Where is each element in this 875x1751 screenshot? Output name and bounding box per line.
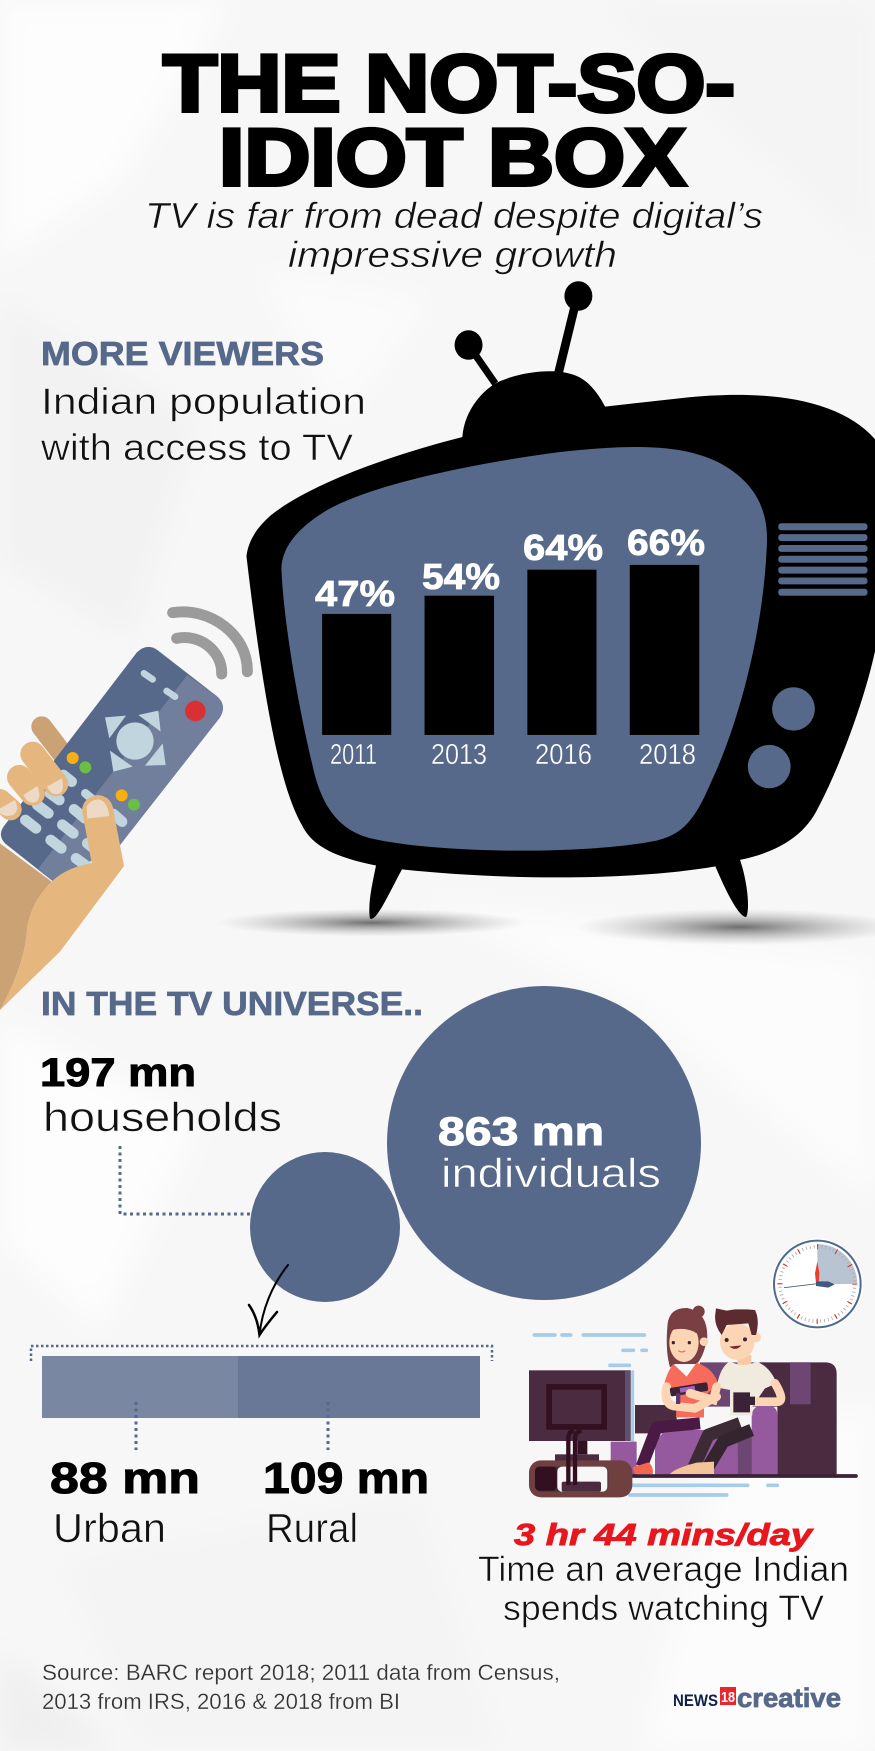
hand [0,754,124,1010]
callout: viewing time: spends watching TV [503,1589,825,1628]
label: 197 mn households: households [43,1094,282,1140]
label: 88 mn urban [50,1454,200,1551]
logo: news18 creative: NEWS [673,1691,718,1710]
speaker grille [778,523,868,596]
label: 109 mn rural: 109 mn [263,1454,429,1503]
label: 863 mn individuals: 863 mn [438,1110,604,1154]
chart year labels: 2013 [431,739,487,771]
tv body [246,281,875,919]
motion lines [534,1335,777,1495]
callout: viewing time: 3 hr 44 mins/day [514,1517,814,1552]
remote [1,647,223,882]
label: 197 mn households [40,1051,282,1140]
chart year labels: 2018 [639,739,696,771]
label: 88 mn urban: 88 mn [50,1454,200,1503]
logo: news18 creative: creative [737,1683,841,1713]
chart value labels: 47% [315,573,395,614]
dpad [105,711,166,772]
label: 197 mn households: 197 mn [40,1051,196,1095]
label: 109 mn rural: Rural [266,1505,358,1551]
woman [633,1306,718,1474]
tv screen [281,447,868,851]
text: Indian population with access to TV: with access to TV [40,427,353,468]
heading: in the tv universe: IN THE TV UNIVERSE.. [41,985,423,1022]
tv set with bar chart [246,281,875,919]
subtitle: impressive growth [288,234,617,275]
chart value labels: 54% [422,556,500,597]
tv knobs [748,687,815,788]
subtitle [145,195,763,275]
remote lights [185,701,206,721]
chart value labels [315,522,705,614]
remote keys [25,673,175,867]
arrow: down to household split [249,1265,288,1335]
logo: news18 creative: 18 [721,1689,735,1706]
heading: more viewers: MORE VIEWERS [41,335,324,372]
callout: viewing time: Time an average Indian [478,1550,849,1589]
title: THE NOT-SO- [163,39,735,129]
illustration: couple watching tv on sofa [529,1306,856,1497]
icon: clock [772,1238,863,1330]
chart year labels: 2011 [330,739,377,771]
label: 109 mn rural [263,1454,429,1551]
back finger [42,727,63,755]
tv set on stand [529,1370,632,1497]
chart year labels: 2016 [535,739,592,771]
bubble: 863 mn individuals [387,986,701,1300]
label: 863 mn individuals: individuals [441,1150,661,1196]
chart bars [322,565,699,735]
dotted bracket [31,1346,492,1361]
tv floor shadows [216,909,875,945]
source note: 2013 from IRS, 2016 & 2018 from BI [42,1689,400,1714]
dotted leader lines [136,1402,328,1450]
title: IDIOT BOX [219,113,686,203]
dotted connector to households bubble [120,1146,250,1214]
signal arcs [173,612,247,674]
title [163,39,735,203]
bubble: 197 mn households [250,1152,400,1302]
chart year labels [330,739,696,771]
icon: hand holding remote [0,612,247,1010]
chart value labels: 64% [523,527,603,568]
text: Indian population with access to TV: Indian population [41,381,366,422]
chart value labels: 66% [627,522,705,563]
source note: Source: BARC report 2018; 2011 data from Census, [42,1660,560,1685]
label: 863 mn individuals [438,1110,661,1196]
stacked bar: urban and rural [42,1356,480,1418]
source note [42,1660,560,1714]
man [670,1308,781,1474]
logo: news18 creative [673,1683,841,1713]
sofa [611,1362,856,1476]
text: Indian population with access to TV [40,381,366,468]
callout: viewing time [478,1517,849,1628]
label: 88 mn urban: Urban [53,1505,166,1551]
subtitle: TV is far from dead despite digital’s [145,195,763,236]
